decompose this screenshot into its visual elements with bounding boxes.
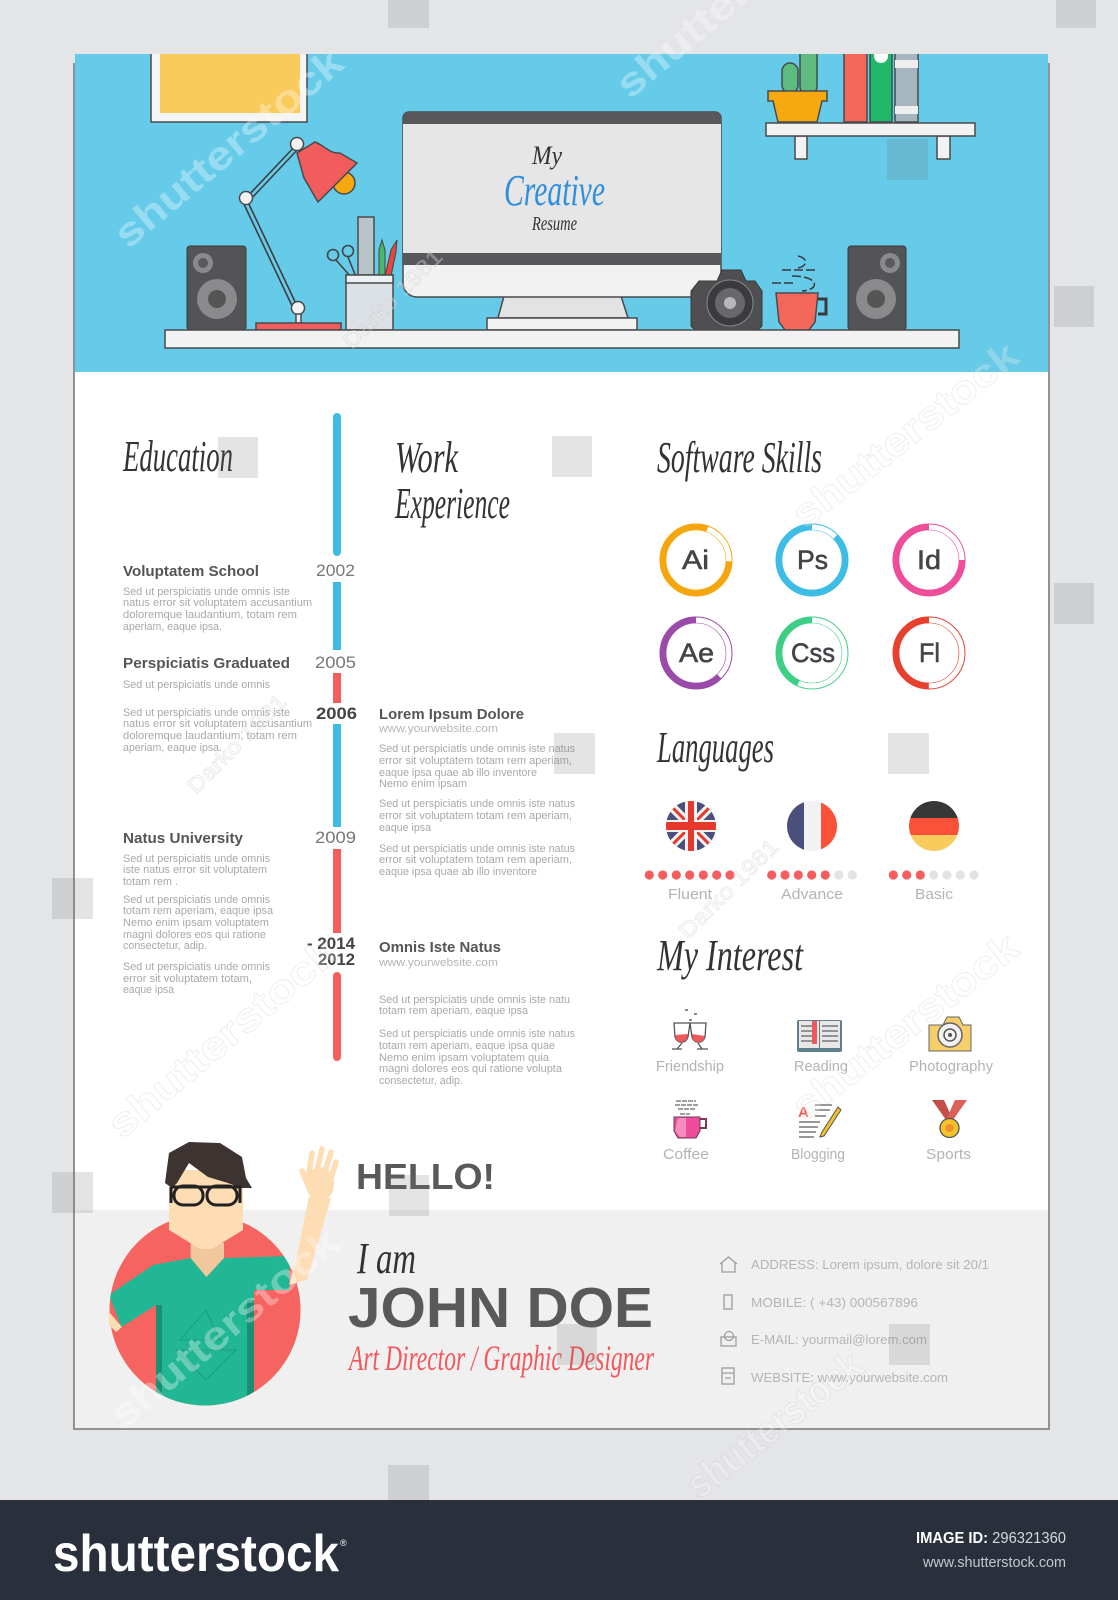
stock watermarks: shutterstock <box>106 39 353 257</box>
skill ring: Ps: Ps <box>797 545 828 575</box>
panel: languages <box>645 723 979 903</box>
interest: reading <box>794 1020 848 1075</box>
education entry: Natus University: totam rem aperiam, eaque ipsa <box>123 905 274 917</box>
panel: work experience <box>378 433 575 1087</box>
work entry: Omnis Iste Natus: totam rem aperiam, eaque ipsa quae <box>379 1040 555 1052</box>
footer bar <box>0 1500 1118 1600</box>
work entry: Lorem Ipsum Dolore: error sit voluptatem totam rem aperiam, <box>379 810 572 822</box>
education entry: Natus University: Sed ut perspiciatis unde omnis <box>123 961 270 973</box>
text: email: E-MAIL: yourmail@lorem.com <box>751 1332 927 1347</box>
shirt <box>109 1256 290 1410</box>
heading: work experience: Experience <box>394 479 510 528</box>
text: website: WEBSITE: www.yourwebsite.com <box>751 1370 948 1385</box>
interest: friendship: Friendship <box>656 1058 724 1075</box>
education entry: Natus University: Natus University <box>123 830 244 847</box>
arm and hand <box>109 1149 336 1332</box>
job title: Art Director / Graphic Designer <box>348 1338 655 1378</box>
work entry: Omnis Iste Natus: www.yourwebsite.com <box>378 957 498 969</box>
education entry: Natus University: error sit voluptatem totam, <box>123 973 252 985</box>
monitor title: My <box>531 141 562 170</box>
icon: desk shelf <box>165 330 959 348</box>
panel: education <box>122 432 312 996</box>
heading: software skills: Software Skills <box>657 433 822 482</box>
work entry: Lorem Ipsum Dolore: error sit voluptatem totam rem aperiam, <box>379 755 572 767</box>
interest: coffee <box>663 1101 709 1163</box>
work entry: Omnis Iste Natus: totam rem aperiam, eaque ipsa <box>379 1005 529 1017</box>
icon: desk lamp <box>240 138 357 330</box>
panel: software skills <box>657 433 965 689</box>
timeline years: 2009 <box>315 828 356 847</box>
panel: contact details <box>720 1257 989 1385</box>
panel: desk illustration header <box>75 46 1048 372</box>
icon: left speaker <box>187 246 246 330</box>
monitor title: Resume <box>531 213 577 235</box>
work entry: Omnis Iste Natus: magni dolores eos qui ratione volupta <box>379 1063 563 1075</box>
stock watermarks: shutterstock <box>102 1219 349 1437</box>
skill ring: Ps <box>776 524 848 596</box>
text: I am: I am <box>356 1234 416 1283</box>
skill ring: Fl: Fl <box>919 638 940 668</box>
work entry: Lorem Ipsum Dolore: Sed ut perspiciatis unde omnis iste natus <box>379 743 575 755</box>
icon: pen cup with tools <box>328 217 397 330</box>
panel: contact band <box>75 1210 1048 1428</box>
skill ring: Ae <box>660 617 732 689</box>
education entry: Perspiciatis Graduated: Perspiciatis Graduated <box>123 655 290 672</box>
interest: friendship <box>656 1010 724 1075</box>
interest: photography <box>909 1017 993 1075</box>
work entry: Lorem Ipsum Dolore: Sed ut perspiciatis unde omnis iste natus <box>379 843 575 855</box>
timeline years: 2002 <box>316 561 355 580</box>
icon: steaming coffee cup <box>772 256 826 330</box>
education entry: Voluptatem School: natus error sit voluptatem accusantium <box>123 597 312 609</box>
education entry: Voluptatem School <box>123 563 312 633</box>
work entry: Lorem Ipsum Dolore: eaque ipsa <box>379 822 432 834</box>
language: English fluent <box>645 801 735 903</box>
interest: blogging <box>791 1104 845 1163</box>
footer registered mark: ® <box>340 1538 347 1548</box>
education entry: Natus University <box>123 830 274 996</box>
icon: wall picture frame <box>151 46 307 122</box>
education entry: Voluptatem School: Voluptatem School <box>123 563 259 580</box>
interest: coffee: Coffee <box>663 1146 709 1163</box>
education entry: Perspiciatis Graduated: Sed ut perspiciatis unde omnis <box>123 679 270 691</box>
stock watermarks: Darko 1981 <box>338 244 447 354</box>
education entry: Natus University: eaque ipsa <box>123 984 175 996</box>
education entry: Natus University: iste natus error sit voluptatem <box>123 864 267 876</box>
panel: my interest <box>656 931 993 1163</box>
language: French advance: Advance <box>781 886 843 903</box>
heading: languages: Languages <box>656 723 774 772</box>
work entry: Lorem Ipsum Dolore: eaque ipsa quae ab illo inventore <box>379 767 537 779</box>
timeline <box>307 413 357 1061</box>
heading: hello: HELLO! <box>356 1156 495 1197</box>
work entry: Lorem Ipsum Dolore <box>378 706 575 878</box>
heading: work experience <box>394 433 510 528</box>
icon: address <box>720 1257 737 1272</box>
hair <box>165 1142 252 1188</box>
education entry: Natus University: totam rem . <box>123 876 178 888</box>
education entry: Perspiciatis Graduated <box>123 655 312 754</box>
timeline years: 2012 <box>318 950 355 969</box>
heading: education: Education <box>122 432 233 481</box>
language: German basic: Basic <box>915 886 954 903</box>
work entry: Lorem Ipsum Dolore: Nemo enim ipsam <box>379 778 467 790</box>
skill ring: Css: Css <box>791 638 835 668</box>
glasses <box>171 1186 241 1205</box>
stock watermarks: shutterstock <box>678 1343 872 1507</box>
language: English fluent: Fluent <box>668 886 713 903</box>
skill ring: Css <box>776 617 848 689</box>
work entry: Omnis Iste Natus: Sed ut perspiciatis unde omnis iste natu <box>379 994 570 1006</box>
stock watermarks: Darko 1981 <box>182 689 291 799</box>
skill ring: Ai: Ai <box>682 545 709 575</box>
education entry: Natus University: Sed ut perspiciatis unde omnis <box>123 894 270 906</box>
icon: shelf with plant and books <box>766 46 975 159</box>
name: JOHN DOE: JOHN DOE <box>348 1276 653 1340</box>
stock watermarks: shutterstock <box>783 925 1028 1129</box>
interest: blogging: A <box>798 1104 809 1121</box>
work entry: Lorem Ipsum Dolore: www.yourwebsite.com <box>378 723 498 735</box>
icon: desktop monitor <box>403 112 721 330</box>
education entry: Natus University: Nemo enim ipsam voluptatem <box>123 917 269 929</box>
skill ring: Id <box>893 524 965 596</box>
timeline years: 2005 <box>315 653 356 672</box>
footer website: www.shutterstock.com <box>922 1554 1066 1571</box>
icon: photo camera <box>691 270 762 330</box>
monitor title <box>506 146 604 230</box>
education entry: Voluptatem School: Sed ut perspiciatis unde omnis iste <box>123 586 290 598</box>
text: mobile: MOBILE: ( +43) 000567896 <box>751 1295 918 1310</box>
monitor title: Creative <box>504 166 605 215</box>
education entry: Voluptatem School: doloremque laudantium, totam rem <box>123 609 297 621</box>
skill ring: Ai <box>660 524 732 596</box>
timeline years <box>307 561 357 969</box>
skill ring: Fl <box>893 617 965 689</box>
education entry: Perspiciatis Graduated: doloremque laudantium, totam rem <box>123 730 297 742</box>
work entry: Lorem Ipsum Dolore: Lorem Ipsum Dolore <box>379 706 524 723</box>
text: address: ADDRESS: Lorem ipsum, dolore sit 20/1 <box>751 1257 989 1272</box>
skill ring: Id: Id <box>917 545 941 575</box>
illustration: waving character <box>109 1142 336 1410</box>
stock watermarks: shutterstock <box>783 333 1028 537</box>
work entry: Lorem Ipsum Dolore: eaque ipsa quae ab illo inventore <box>379 866 537 878</box>
stock watermarks: Darko 1981 <box>674 834 783 944</box>
work entry: Omnis Iste Natus: consectetur, adip. <box>379 1075 463 1087</box>
heading: work experience: Work <box>395 433 459 482</box>
heading: my interest: My Interest <box>656 931 804 980</box>
work entry: Omnis Iste Natus: Omnis Iste Natus <box>379 939 501 956</box>
education entry: Perspiciatis Graduated: natus error sit voluptatem accusantium <box>123 718 312 730</box>
education entry: Natus University: consectetur, adip. <box>123 940 207 952</box>
interest: sports: Sports <box>926 1146 971 1163</box>
stock watermarks: shutterstock <box>100 929 347 1147</box>
education entry: Natus University: magni dolores eos qui ratione <box>123 929 266 941</box>
interest: sports <box>926 1100 971 1163</box>
language: French advance <box>767 801 857 903</box>
work entry: Lorem Ipsum Dolore: Sed ut perspiciatis unde omnis iste natus <box>379 798 575 810</box>
timeline years: 2006 <box>316 704 357 723</box>
interest: reading: Reading <box>794 1058 848 1075</box>
footer logo: shutterstock <box>53 1525 339 1583</box>
work entry: Omnis Iste Natus: Sed ut perspiciatis unde omnis iste natus <box>379 1028 575 1040</box>
icon: mobile <box>724 1295 732 1309</box>
work entry: Lorem Ipsum Dolore: error sit voluptatem totam rem aperiam, <box>379 854 572 866</box>
work entry: Omnis Iste Natus: Nemo enim ipsam voluptatem quia <box>379 1052 550 1064</box>
icon: email <box>721 1332 736 1346</box>
icon: right speaker <box>848 246 906 330</box>
skill ring: Ae: Ae <box>679 638 714 668</box>
icon: website <box>722 1368 734 1384</box>
work entry: Omnis Iste Natus <box>378 939 575 1087</box>
education entry: Voluptatem School: aperiam, eaque ipsa. <box>123 621 222 633</box>
education entry: Perspiciatis Graduated: Sed ut perspiciatis unde omnis iste <box>123 707 290 719</box>
education entry: Natus University: Sed ut perspiciatis unde omnis <box>123 853 270 865</box>
interest: photography: Photography <box>909 1058 993 1075</box>
neck <box>191 1243 224 1277</box>
education entry: Perspiciatis Graduated: aperiam, eaque ipsa. <box>123 742 222 754</box>
footer image id: IMAGE ID: 296321360 <box>916 1530 1066 1547</box>
language: German basic <box>889 801 979 903</box>
interest: blogging: Blogging <box>791 1146 845 1163</box>
timeline years: - 2014 <box>307 934 356 953</box>
face <box>169 1170 243 1249</box>
panel: resume page <box>75 54 1048 1428</box>
